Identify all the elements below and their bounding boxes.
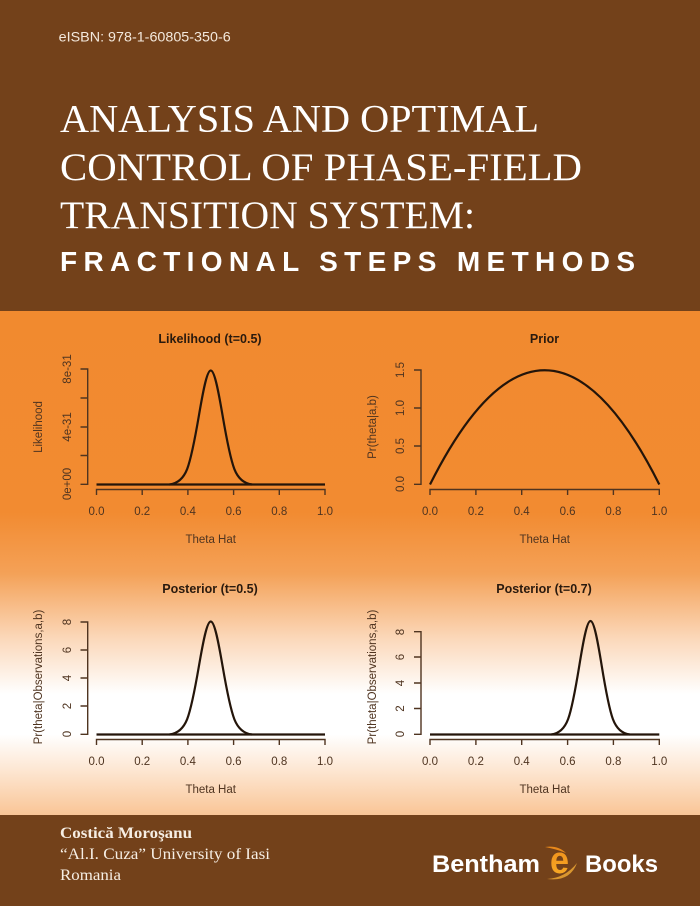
chart: Posterior t=0.5: 8 [62, 619, 74, 625]
chart: Posterior t=0.5: 0.2 [134, 756, 150, 768]
chart: Prior: 0.8 [605, 506, 621, 518]
chart: Likelihood: Theta Hat [185, 534, 237, 546]
title: ANALYSIS AND OPTIMAL [60, 98, 539, 140]
publisher logo: Books [585, 851, 658, 878]
title [60, 98, 582, 237]
chart: Likelihood: Likelihood (t=0.5) [158, 332, 262, 346]
title: TRANSITION SYSTEM: [60, 194, 475, 237]
title: CONTROL OF PHASE-FIELD [60, 146, 582, 189]
chart: Posterior t=0.7: 0.0 [422, 756, 438, 768]
chart: Likelihood: 0.8 [271, 506, 287, 518]
chart: Prior: 0.6 [560, 506, 576, 518]
author block: Costică Moroşanu [60, 825, 192, 842]
chart: Posterior t=0.5: 0.0 [88, 756, 104, 768]
chart: Posterior t=0.7: 0.6 [560, 756, 576, 768]
chart: Prior: 0.0 [395, 476, 407, 492]
chart: Posterior t=0.5: 1.0 [317, 756, 333, 768]
chart: Posterior t=0.5: 0.6 [226, 756, 242, 768]
chart: Likelihood: 0.4 [180, 506, 196, 518]
chart: Prior [367, 332, 667, 546]
chart: Likelihood: 8e-31 [62, 354, 74, 384]
chart: Prior: Theta Hat [519, 534, 571, 546]
icon: e swoosh [545, 840, 577, 882]
publisher logo [432, 840, 658, 882]
chart: Posterior t=0.7: 8 [395, 629, 407, 635]
chart: Posterior t=0.7: Posterior (t=0.7) [496, 582, 592, 596]
chart: Posterior t=0.5: 4 [62, 674, 74, 681]
eISBN line: eISBN: 978-1-60805-350-6 [59, 30, 231, 44]
author block: Romania [60, 867, 121, 884]
chart: Posterior t=0.7: 0.2 [468, 756, 484, 768]
chart: Likelihood: 0.0 [88, 506, 104, 518]
chart: Posterior t=0.7 [367, 582, 667, 796]
chart: Likelihood: 4e-31 [62, 412, 74, 442]
chart: Likelihood [33, 332, 333, 546]
chart: Posterior t=0.7: 6 [395, 654, 407, 660]
chart: Posterior t=0.5: 2 [62, 703, 74, 709]
chart: Posterior t=0.5: Posterior (t=0.5) [162, 582, 258, 596]
chart: Posterior t=0.5: 0 [62, 731, 74, 737]
chart: Prior: 0.5 [395, 438, 407, 454]
chart: Likelihood: 1.0 [317, 506, 333, 518]
chart: Posterior t=0.7: Pr(theta|Observations,a,b) [367, 610, 379, 744]
chart: Prior: 1.0 [395, 400, 407, 416]
chart: Likelihood: Likelihood [33, 401, 45, 453]
top brown header panel [0, 0, 700, 311]
gradient chart panel [0, 311, 700, 815]
author block [60, 825, 271, 884]
chart: Prior: Prior [530, 332, 559, 346]
chart: Posterior t=0.7: Theta Hat [519, 784, 571, 796]
chart: Posterior t=0.5: 6 [62, 647, 74, 653]
chart: Likelihood: 0.2 [134, 506, 150, 518]
subtitle: FRACTIONAL STEPS METHODS [60, 246, 635, 277]
author block: “Al.I. Cuza” University of Iasi [60, 846, 271, 863]
chart: Prior: 0.4 [514, 506, 530, 518]
chart: Posterior t=0.7: 0 [395, 731, 407, 737]
chart: Prior: Pr(theta|a,b) [367, 395, 379, 459]
chart: Posterior t=0.7: 2 [395, 705, 407, 712]
chart: Prior: 1.5 [395, 362, 407, 378]
chart: Posterior t=0.5: Pr(theta|Observations,a,b) [33, 610, 45, 744]
chart: Posterior t=0.7: 4 [395, 679, 407, 686]
chart: Posterior t=0.7: 1.0 [651, 756, 667, 768]
bottom brown footer panel [0, 815, 700, 906]
chart: Prior: 1.0 [651, 506, 667, 518]
chart: Posterior t=0.5: 0.4 [180, 756, 196, 768]
chart: Prior: 0.2 [468, 506, 484, 518]
chart: Likelihood: 0.6 [226, 506, 242, 518]
chart: Posterior t=0.7: 0.8 [605, 756, 621, 768]
chart: Likelihood: 0e+00 [62, 468, 74, 500]
chart: Posterior t=0.5: Theta Hat [185, 784, 237, 796]
publisher logo: Bentham [432, 851, 540, 878]
icon: e swoosh: e [550, 840, 569, 882]
chart: Posterior t=0.5: 0.8 [271, 756, 287, 768]
chart: Posterior t=0.5 [33, 582, 333, 796]
chart: Prior: 0.0 [422, 506, 438, 518]
chart: Posterior t=0.7: 0.4 [514, 756, 530, 768]
